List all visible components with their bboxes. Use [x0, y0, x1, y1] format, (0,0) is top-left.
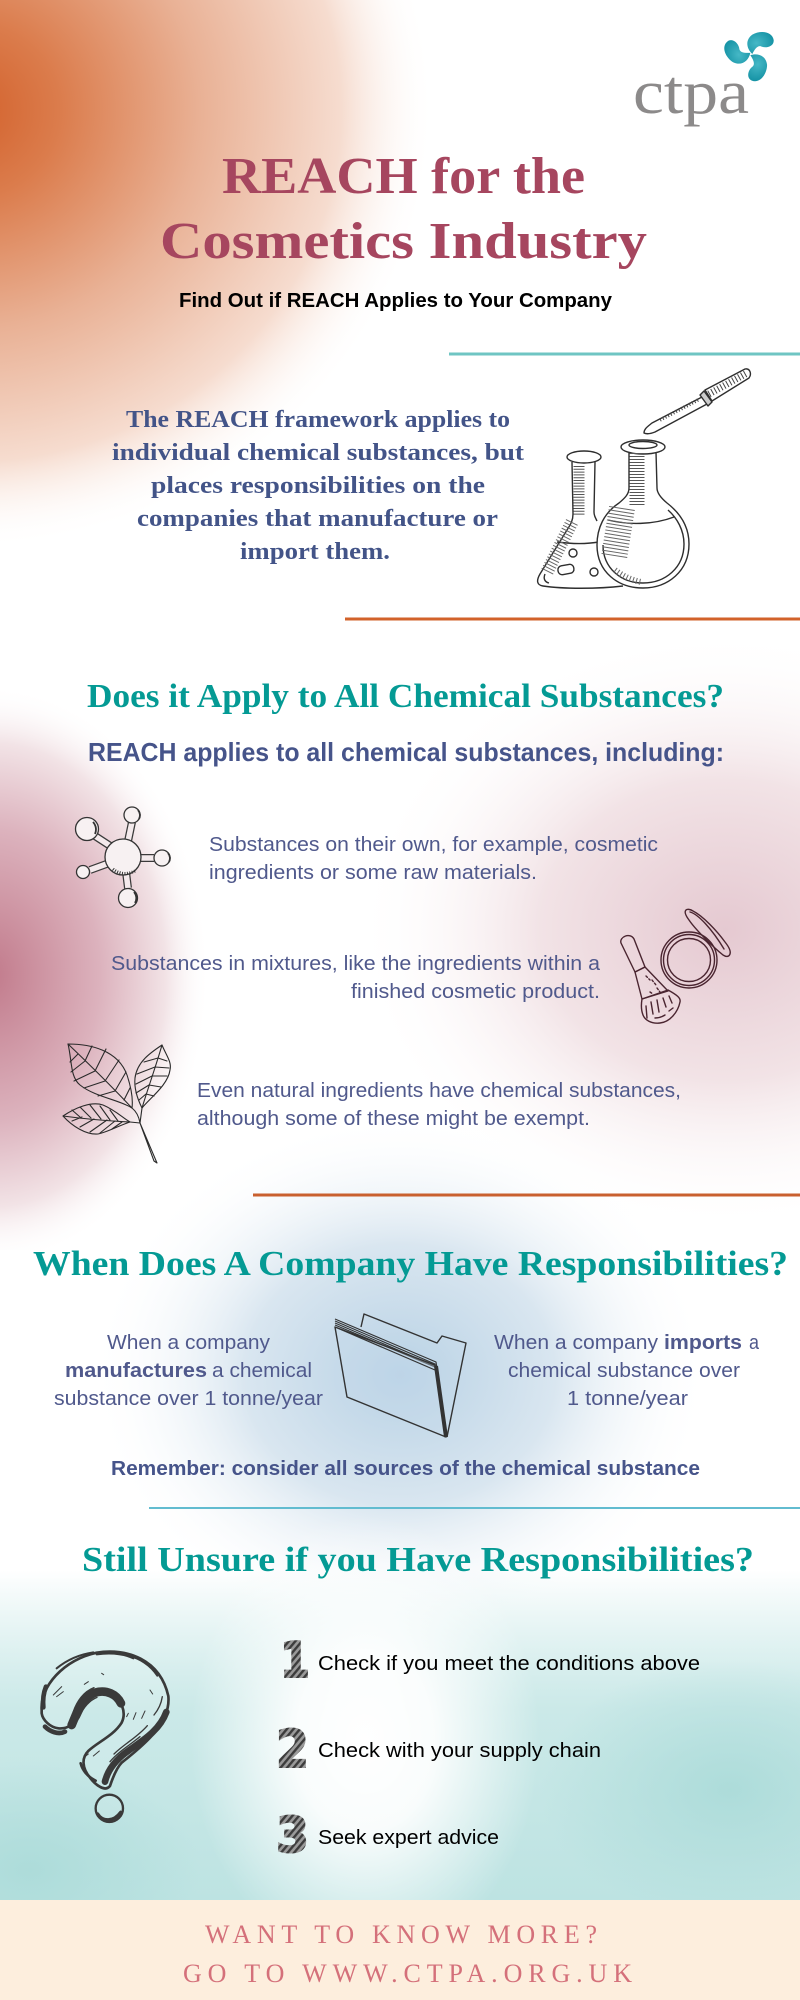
title: Cosmetics Industry — [160, 213, 647, 270]
step 3: Seek expert advice — [318, 1826, 499, 1849]
title: REACH for the — [222, 148, 585, 205]
footer band — [0, 1900, 800, 2000]
logo swirl icon — [721, 32, 774, 85]
pipette — [644, 369, 750, 434]
subtitle: Find Out if REACH Applies to Your Company — [179, 290, 613, 312]
logo: ctpa — [633, 32, 774, 127]
heading: when does a company have responsibilities: When Does A Company Have Responsibilities? — [33, 1244, 788, 1283]
text: substances in mixtures: Substances in mixtures, like the ingredients within a — [111, 953, 601, 975]
step 2: Check with your supply chain — [318, 1739, 601, 1762]
icon: makeup compact and brush — [621, 909, 730, 1023]
text: substances on their own: ingredients or some raw materials. — [209, 862, 537, 884]
text: natural ingredients: Even natural ingredients have chemical substances, — [197, 1080, 681, 1102]
text: imports condition: chemical substance over — [508, 1360, 740, 1382]
logo: ctpa: ctpa — [633, 59, 749, 127]
text: substances in mixtures: finished cosmetic product. — [351, 981, 600, 1003]
text: substances on their own: Substances on their own, for example, cosmetic — [209, 834, 658, 856]
round flask — [597, 440, 689, 588]
text: manufactures condition: substance over 1 tonne/year — [54, 1388, 323, 1410]
intro text: import them. — [240, 538, 390, 565]
text: manufactures condition: manufactures — [65, 1360, 207, 1382]
conical flask — [538, 451, 623, 588]
icon: question mark — [42, 1652, 169, 1822]
subheading: reach applies: REACH applies to all chemical substances, including: — [88, 737, 724, 767]
text: imports condition — [494, 1332, 760, 1410]
text: substances on their own — [209, 834, 658, 884]
icon: leaves — [63, 1044, 170, 1163]
text: remember note: Remember: consider all sources of the chemical substance — [111, 1458, 700, 1480]
text: manufactures condition: a chemical — [212, 1360, 312, 1382]
intro text: places responsibilities on the — [151, 472, 485, 499]
text: natural ingredients — [197, 1080, 681, 1130]
footer band: GO TO WWW.CTPA.ORG.UK — [183, 1959, 632, 1988]
intro text — [112, 406, 525, 565]
intro text: individual chemical substances, but — [112, 439, 525, 466]
icon: folder — [335, 1314, 466, 1437]
text: manufactures condition: When a company — [107, 1332, 270, 1354]
title — [160, 148, 647, 270]
icon: flasks and pipette — [538, 369, 750, 588]
text: imports condition: When a company — [494, 1332, 658, 1354]
text: imports condition: a — [749, 1332, 760, 1354]
text: imports condition: 1 tonne/year — [567, 1388, 688, 1410]
text: imports condition: imports — [664, 1332, 742, 1354]
heading: does it apply: Does it Apply to All Chemical Substances? — [87, 678, 724, 715]
icon: molecule — [76, 807, 170, 908]
step 1: Check if you meet the conditions above — [318, 1652, 700, 1675]
step 3 — [276, 1807, 499, 1864]
step 1: 1 — [280, 1632, 310, 1689]
intro text: companies that manufacture or — [137, 505, 498, 532]
footer band: WANT TO KNOW MORE? — [205, 1920, 597, 1949]
text: natural ingredients: although some of these might be exempt. — [197, 1108, 590, 1130]
step 2: 2 — [276, 1720, 309, 1780]
step 2 — [276, 1720, 601, 1780]
step 1 — [280, 1632, 700, 1689]
text: substances in mixtures — [111, 953, 601, 1003]
heading: still unsure: Still Unsure if you Have Responsibilities? — [82, 1540, 754, 1579]
list: next steps — [276, 1632, 700, 1864]
intro text: The REACH framework applies to — [126, 406, 510, 433]
text: manufactures condition — [54, 1332, 323, 1410]
step 3: 3 — [276, 1807, 309, 1864]
